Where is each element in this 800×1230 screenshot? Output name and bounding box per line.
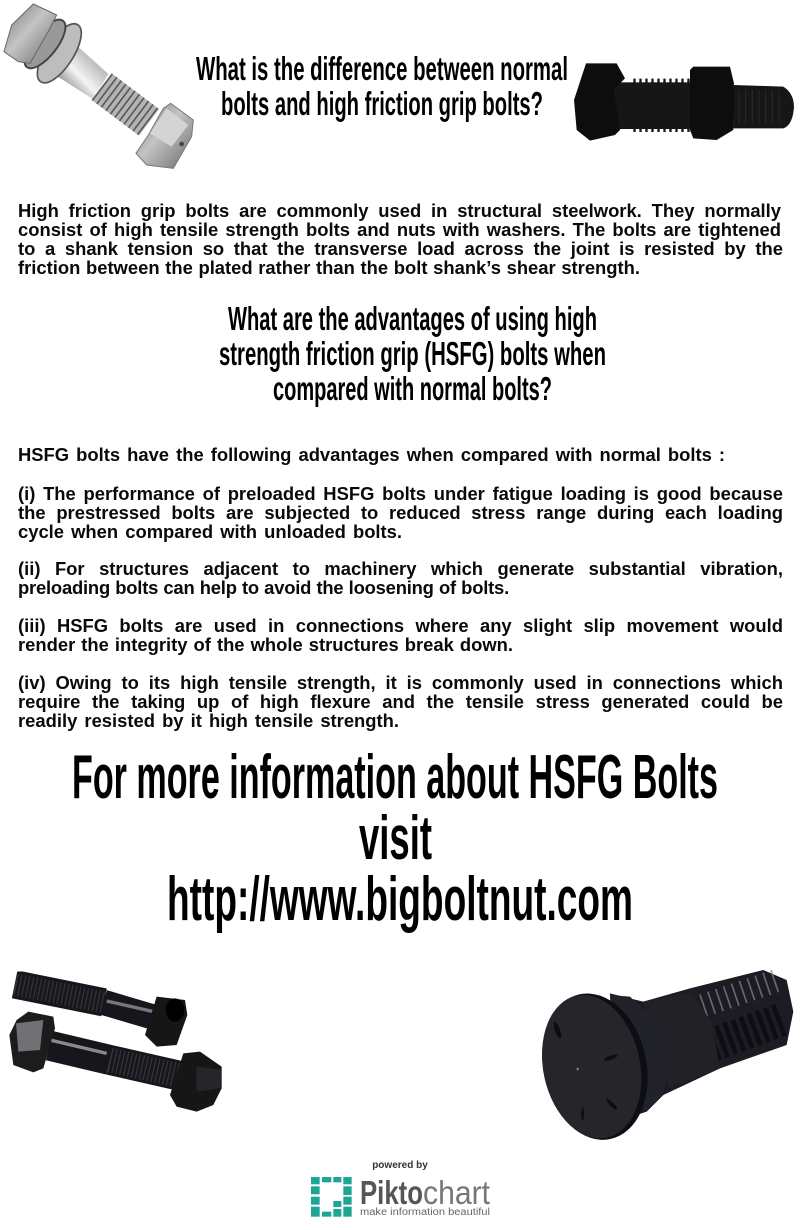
text block: introduction: [18, 200, 783, 278]
image: two black bolts: [9, 984, 222, 1112]
text block: advantage i: [18, 483, 783, 542]
text block: introduction: friction between the plated rather than the bolt shank’s shear strength.: [18, 257, 640, 278]
text block: advantage iv: require the taking up of high flexure and the tensile stress generated could be: [18, 691, 783, 712]
text block: advantage iii: [18, 615, 783, 655]
text block: advantage iv: [18, 672, 783, 731]
text block: advantage i: cycle when compared with unloaded bolts.: [18, 521, 402, 542]
text block: advantage ii: preloading bolts can help to avoid the loosening of bolts.: [18, 577, 509, 598]
image: silver bolt with nut and washers: [4, 4, 193, 168]
logo: powered by Piktochart: chart: [423, 1174, 490, 1211]
text block: advantage ii: (ii) For structures adjacent to machinery which generate substantial vibration,: [18, 558, 783, 579]
text block: advantage iii: render the integrity of the whole structures break down.: [18, 634, 513, 655]
call to action: more information: [72, 743, 718, 934]
image: black bolt with nut: [574, 63, 794, 141]
logo: powered by Piktochart: [311, 1160, 490, 1218]
text block: introduction: consist of high tensile strength bolts and nuts with washers. The bolts are tightened: [18, 219, 781, 240]
logo: powered by Piktochart: powered by: [372, 1160, 428, 1171]
text block: advantage i: (i) The performance of preloaded HSFG bolts under fatigue loading is good because: [18, 483, 783, 504]
text block: introduction: High friction grip bolts are commonly used in structural steelwork. They normally: [18, 200, 781, 221]
call to action: more information: visit: [359, 804, 432, 873]
title: difference between bolts: What is the difference between normal: [196, 50, 568, 87]
image: large black plow bolt: [529, 970, 793, 1150]
text block: advantage iii: (iii) HSFG bolts are used in connections where any slight slip movement would: [18, 615, 783, 636]
title: difference between bolts: bolts and high friction grip bolts?: [221, 85, 543, 122]
logo: powered by Piktochart: Pikto: [360, 1174, 423, 1211]
heading: advantages of HSFG bolts: [219, 300, 606, 407]
heading: advantages of HSFG bolts: compared with normal bolts?: [273, 370, 552, 407]
title: difference between bolts: [196, 50, 568, 122]
logo: powered by Piktochart: make information beautiful: [360, 1207, 490, 1218]
text block: advantage iv: (iv) Owing to its high tensile strength, it is commonly used in connections which: [18, 672, 783, 693]
text block: advantage iv: readily resisted by it high tensile strength.: [18, 710, 399, 731]
text block: advantage i: the prestressed bolts are subjected to reduced stress range during each loading: [18, 502, 783, 523]
text block: advantages intro: HSFG bolts have the following advantages when compared with normal bolts :: [18, 444, 725, 465]
text block: advantage ii: [18, 558, 783, 598]
text block: introduction: to a shank tension so that the transverse load across the joint is resisted by the: [18, 238, 783, 259]
